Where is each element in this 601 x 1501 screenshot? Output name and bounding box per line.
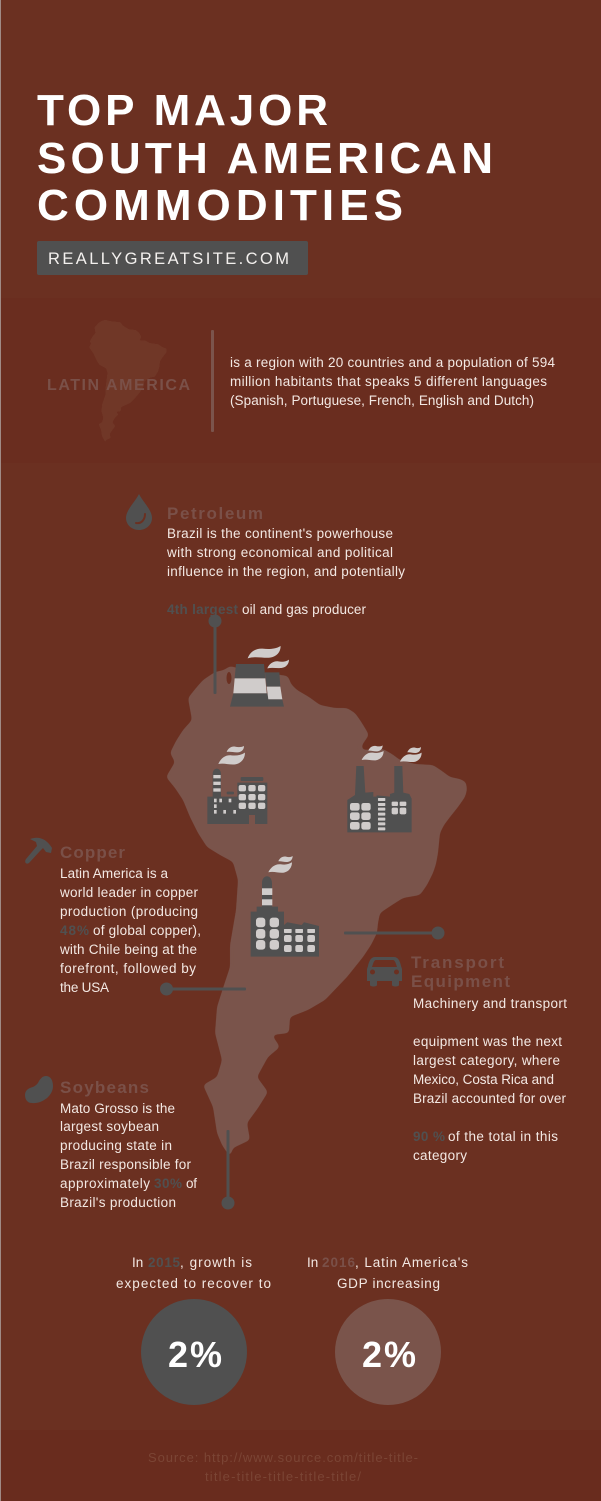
- panel: latin america intro: [47, 320, 555, 442]
- title: TOP MAJOR: [37, 86, 328, 135]
- soybeans text: largest soybean: [60, 1119, 159, 1134]
- petroleum text: with strong economical and political: [166, 545, 393, 560]
- copper text: [59, 866, 201, 995]
- heading: transport equipment: Transport: [411, 953, 504, 972]
- copper text: 48%: [60, 923, 89, 938]
- transport text: Brazil accounted for over: [413, 1091, 566, 1106]
- copper text: world leader in copper: [59, 885, 198, 900]
- website badge: [37, 241, 308, 275]
- soybeans text: producing state in: [60, 1138, 172, 1153]
- caption: 2015: expected to recover to: [116, 1276, 271, 1291]
- title: [37, 86, 493, 230]
- icon: small continent map: [89, 320, 166, 442]
- transport text: of the total in this: [448, 1129, 558, 1144]
- copper text: with Chile being at the: [59, 942, 197, 957]
- divider: [211, 330, 214, 432]
- intro text: million habitants that speaks 5 different languages: [230, 374, 547, 389]
- panel: petroleum: [126, 494, 405, 694]
- pin: copper: [160, 982, 246, 996]
- icon: soybean: [25, 1076, 53, 1103]
- icon: factory bottom: [251, 856, 319, 957]
- panel: soybeans: [25, 1076, 234, 1210]
- transport text: 90 %: [413, 1129, 445, 1144]
- soybeans text: approximately: [60, 1176, 150, 1191]
- caption: 2015: [116, 1255, 271, 1291]
- caption: 2015: In: [132, 1255, 143, 1270]
- caption: 2016: In: [307, 1255, 318, 1270]
- soybeans text: of: [186, 1176, 197, 1191]
- pin: petroleum: [208, 614, 222, 694]
- stat circle: 2%: [335, 1299, 441, 1405]
- intro text: (Spanish, Portuguese, French, English and Dutch): [230, 393, 534, 408]
- transport text: Machinery and transport: [413, 996, 567, 1011]
- intro text: is a region with 20 countries and a population of 594: [230, 355, 555, 370]
- caption: 2016: GDP increasing: [337, 1276, 440, 1291]
- petroleum text: influence in the region, and potentially: [167, 564, 405, 579]
- icon: oil drop: [126, 494, 152, 530]
- caption: 2015: 2015: [148, 1255, 180, 1270]
- stat circle: 2%: 2%: [168, 1334, 222, 1375]
- transport text: category: [413, 1148, 467, 1163]
- source: title-title-title-title-title/: [205, 1469, 361, 1484]
- soybeans text: Brazil's production: [60, 1195, 176, 1210]
- panel: 2015 growth: [116, 1255, 271, 1405]
- heading: transport equipment: [411, 953, 510, 991]
- icon: factory left: [207, 746, 267, 824]
- pin: transport: [344, 926, 444, 940]
- heading: transport equipment: Equipment: [411, 972, 510, 991]
- caption: 2016: , Latin America's: [355, 1255, 468, 1270]
- source: Source: http://www.source.com/title-title-: [148, 1450, 418, 1465]
- heading: petroleum: Petroleum: [167, 504, 263, 523]
- copper text: forefront, followed by: [60, 961, 196, 976]
- stat circle: 2%: [141, 1299, 247, 1405]
- intro text: [230, 355, 555, 408]
- caption: 2016: 2016: [322, 1255, 355, 1270]
- soybeans text: [60, 1101, 197, 1210]
- copper text: the USA: [60, 980, 109, 995]
- copper text: of global copper),: [93, 923, 201, 938]
- copper text: production (producing: [60, 904, 198, 919]
- icon: power plant: [230, 646, 289, 707]
- petroleum text: oil and gas producer: [242, 602, 366, 617]
- petroleum text: [166, 526, 405, 617]
- source: [148, 1450, 418, 1484]
- panel: copper: [25, 838, 246, 996]
- title: SOUTH AMERICAN: [37, 134, 493, 183]
- heading: soybeans: Soybeans: [60, 1078, 149, 1097]
- stat circle: 2%: 2%: [362, 1334, 416, 1375]
- caption: 2015: , growth is: [180, 1255, 252, 1270]
- heading: copper: Copper: [60, 843, 125, 862]
- heading: latin america: LATIN AMERICA: [47, 377, 190, 394]
- pin: soybeans: [222, 1130, 234, 1210]
- soybeans text: 30%: [154, 1176, 182, 1191]
- website badge: REALLYGREATSITE.COM: [48, 250, 289, 268]
- transport text: largest category, where: [413, 1053, 560, 1068]
- transport text: equipment was the next: [413, 1034, 562, 1049]
- icon: factory right: [347, 745, 422, 832]
- panel: transport equipment: [344, 926, 567, 1163]
- transport text: [413, 996, 567, 1163]
- transport text: Mexico, Costa Rica and: [413, 1072, 554, 1087]
- icon: hammer: [25, 838, 52, 864]
- petroleum text: 4th largest: [167, 602, 238, 617]
- panel: 2016 gdp: [307, 1255, 468, 1405]
- map of south america: [166, 666, 467, 1157]
- title: COMMODITIES: [37, 181, 403, 230]
- caption: 2016: [307, 1255, 468, 1291]
- copper text: Latin America is a: [60, 866, 168, 881]
- icon: car: [367, 957, 402, 986]
- soybeans text: Brazil responsible for: [60, 1157, 192, 1172]
- soybeans text: Mato Grosso is the: [60, 1101, 175, 1116]
- petroleum text: Brazil is the continent's powerhouse: [167, 526, 393, 541]
